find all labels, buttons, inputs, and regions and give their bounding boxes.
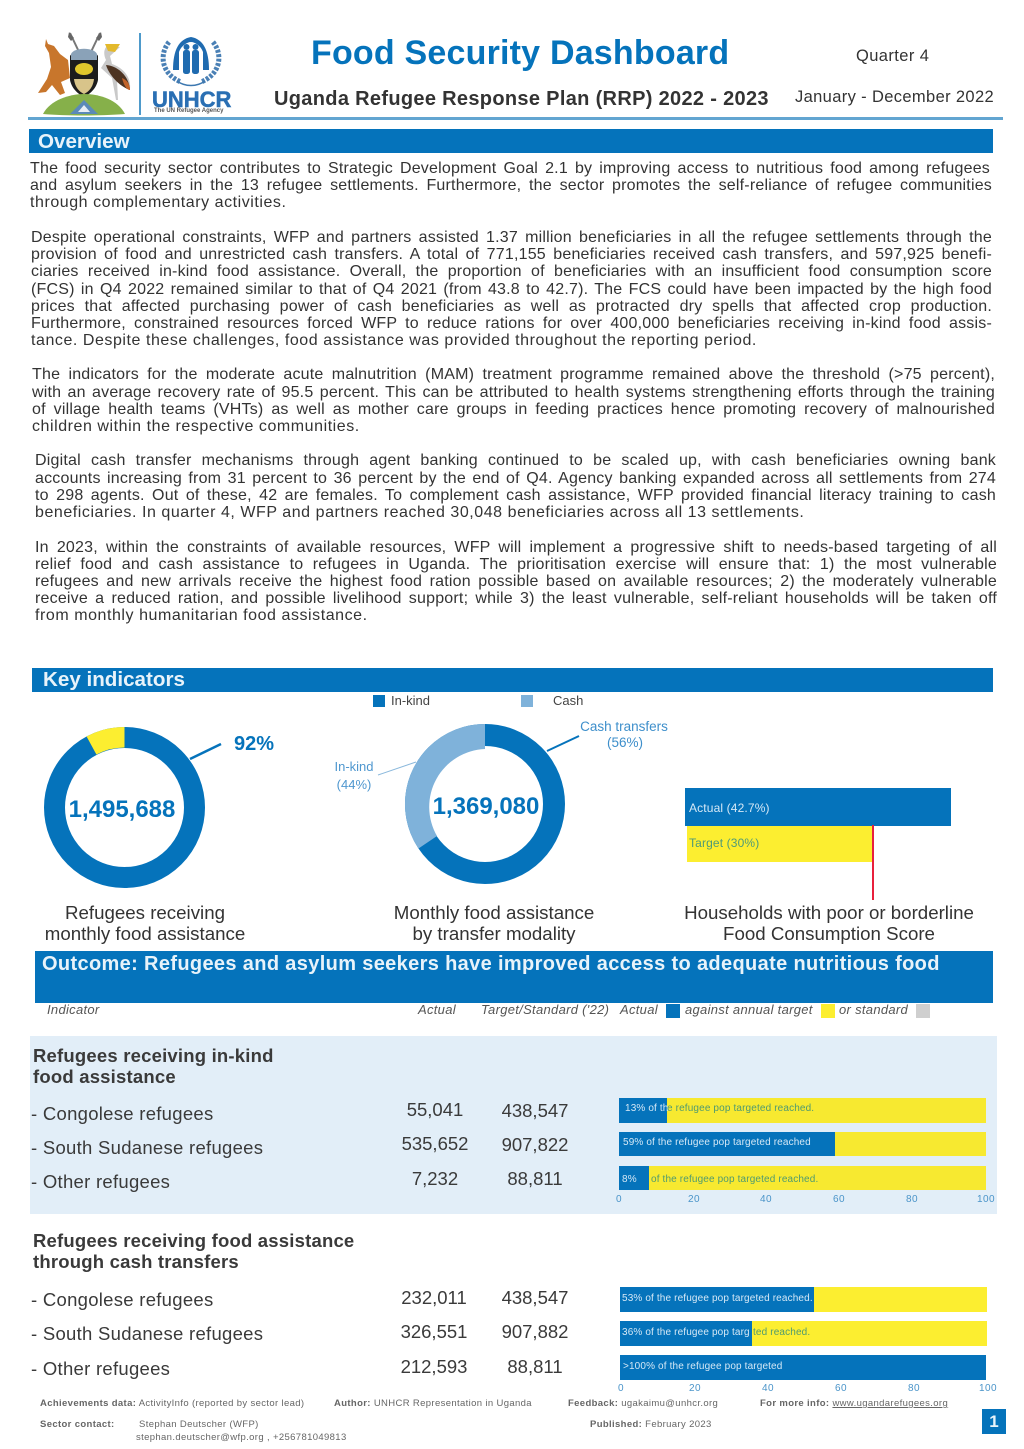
axis: 0 <box>616 1194 622 1205</box>
panel: in-kind <box>30 1036 997 1214</box>
axis: 20 <box>689 1383 701 1394</box>
logo: UNHCR <box>152 37 232 114</box>
logo tagline: The UN Refugee Agency <box>154 108 223 114</box>
paragraph 2 <box>31 229 992 349</box>
paragraph 3: children within the respective communities. <box>32 418 360 435</box>
subheading: in-kind: food assistance <box>33 1066 176 1087</box>
axis: 80 <box>906 1194 918 1205</box>
bar: other <box>619 1166 986 1190</box>
section: cash assistance <box>31 1230 568 1379</box>
value: 1,495,688: 1,495,688 <box>69 796 175 823</box>
row: South Sudanese: 326,551 <box>401 1321 467 1342</box>
bar chart: food consumption score <box>685 788 951 900</box>
quarter: Quarter 4 <box>856 47 929 65</box>
axis: 60 <box>835 1383 847 1394</box>
paragraph 1: and asylum seekers in the 13 refugee settlements. Furthermore, the sector promotes the self-reliance of refugee communities <box>30 177 992 194</box>
subheading: in-kind <box>33 1045 274 1087</box>
caption: food consumption: Households with poor or borderline <box>684 902 974 923</box>
paragraph 4 <box>35 452 996 521</box>
overview heading: Overview <box>38 130 130 153</box>
row: South Sudanese <box>31 1133 568 1158</box>
row: other: 7,232 <box>412 1168 458 1189</box>
footer: sector contact: Sector contact: <box>40 1419 115 1430</box>
logo divider <box>139 33 141 115</box>
bar: target <box>687 826 873 862</box>
paragraph 5: refugees and new arrivals receive the highest food ration possible based on available resources; 2) the moderately vulnerable <box>35 573 997 590</box>
bar: South Sudanese <box>619 1132 986 1156</box>
overview text <box>30 160 997 624</box>
subheading: cash <box>33 1230 354 1272</box>
row: Congolese: - Congolese refugees <box>31 1103 214 1124</box>
axis: 20 <box>688 1194 700 1205</box>
bar chart: in-kind <box>616 1098 995 1205</box>
paragraph 3 <box>32 366 995 435</box>
legend: actual <box>619 1002 680 1018</box>
bar: actual: Actual (42.7%) <box>689 801 770 815</box>
row: Congolese: 55,041 <box>407 1099 463 1120</box>
bar: other <box>620 1355 986 1380</box>
bar: South Sudanese: ted reached. <box>753 1327 810 1338</box>
paragraph 3: of village health teams (VHTs) as well as mother care groups in feeding practices hence promoting recovery of malnourished <box>32 401 995 418</box>
key indicators heading <box>32 668 993 692</box>
row: other: - Other refugees <box>31 1171 170 1192</box>
caption: refugees receiving <box>45 902 245 944</box>
legend: annual target: against annual target <box>685 1002 813 1017</box>
icon: UNHCR wreath and people <box>160 37 222 86</box>
axis: 100 <box>977 1194 995 1205</box>
legend: in-kind <box>373 693 430 708</box>
axis: 100 <box>979 1383 997 1394</box>
key indicators heading: Key indicators <box>43 668 185 691</box>
paragraph 2: tance. Despite these challenges, food assistance was provided throughout the reporting period. <box>31 332 757 349</box>
axis <box>618 1383 997 1394</box>
footer: contact details <box>136 1419 347 1444</box>
table header <box>47 1002 930 1018</box>
legend: transfer modality <box>373 693 583 708</box>
subheading: in-kind: Refugees receiving in-kind <box>33 1045 274 1066</box>
bar: other: >100% of the refugee pop targeted <box>623 1361 782 1372</box>
bar: South Sudanese: 36% of the refugee pop targ <box>622 1327 750 1338</box>
row: South Sudanese: - South Sudanese refugees <box>31 1137 263 1158</box>
bar: Congolese: 13% of th <box>625 1103 669 1114</box>
bar: South Sudanese: 59% of the refugee pop targeted reached <box>623 1137 811 1148</box>
legend: standard: or standard <box>839 1002 908 1017</box>
row: Congolese <box>31 1099 568 1124</box>
caption: food consumption <box>684 902 974 944</box>
legend: in-kind: In-kind <box>391 693 430 708</box>
footer: published: Published: February 2023 <box>590 1419 712 1430</box>
paragraph 2: prices that affected purchasing power of cash beneficiaries as well as protracted dry spells that affected crop production. <box>31 298 992 315</box>
footer: feedback: Feedback: ugakaimu@unhcr.org <box>568 1398 718 1409</box>
caption: transfer modality: Monthly food assistance <box>394 902 594 923</box>
paragraph 2: Despite operational constraints, WFP and partners assisted 1.37 million beneficiaries in all the refugee settlements through the <box>31 229 992 246</box>
value: 1,369,080: 1,369,080 <box>433 793 539 820</box>
paragraph 4: to 298 agents. Out of these, 42 are females. To complement cash assistance, WFP provided financial literacy training to cash <box>35 487 996 504</box>
bar: Congolese: 53% of the refugee pop targeted reached. <box>622 1293 813 1304</box>
column: actual: Actual <box>418 1002 456 1017</box>
axis: 80 <box>908 1383 920 1394</box>
row: South Sudanese: 535,652 <box>402 1133 468 1154</box>
paragraph 4: beneficiaries. In quarter 4, WFP and partners reached 30,048 beneficiaries across all 13 settlements. <box>35 504 804 521</box>
label: in-kind 44%: In-kind <box>334 759 374 774</box>
label: cash 56%: Cash transfers <box>580 719 668 734</box>
paragraph 5: from monthly humanitarian food assistance. <box>35 607 368 624</box>
label: 92%: 92% <box>234 733 274 755</box>
subheading: cash: Refugees receiving food assistance <box>33 1230 354 1251</box>
paragraph 4: accounts increasing from 31 percent to 36 percent by the end of Q4. Agency banking expanded across all settlements from 274 <box>35 470 996 487</box>
footer: more info: For more info: www.ugandarefugees.org <box>760 1398 948 1409</box>
axis: 40 <box>760 1194 772 1205</box>
paragraph 3: The indicators for the moderate acute malnutrition (MAM) treatment programme remained above the threshold (>75 percent), <box>32 366 995 383</box>
axis: 40 <box>762 1383 774 1394</box>
subtitle: Uganda Refugee Response Plan (RRP) 2022 - 2023 <box>274 88 769 110</box>
bar: other: 8% <box>622 1174 637 1185</box>
row: other: - Other refugees <box>31 1358 170 1379</box>
row: Congolese <box>31 1287 568 1310</box>
row: South Sudanese: - South Sudanese refugees <box>31 1323 263 1344</box>
row: Congolese: 232,011 <box>401 1287 467 1308</box>
footer: data source: Achievements data: ActivityInfo (reported by sector lead) <box>40 1398 304 1409</box>
legend: actual: Actual <box>620 1002 658 1017</box>
page number <box>982 1409 1006 1434</box>
column: target: Target/Standard ('22) <box>481 1002 609 1017</box>
paragraph 1: through complementary activities. <box>30 194 286 211</box>
bar: target: Target (30%) <box>689 836 759 850</box>
paragraph 3: with an average recovery rate of 95.5 percent. This can be attributed to health systems strengthening efforts through the training <box>32 384 995 401</box>
period: January - December 2022 <box>795 88 994 106</box>
subheading: cash: through cash transfers <box>33 1251 239 1272</box>
bar: actual <box>685 788 951 826</box>
paragraph 5: receive a reduced ration, and possible livelihood support; while 3) the least vulnerable, self-reliant households will be taken off <box>35 590 997 607</box>
paragraph 5 <box>35 539 997 624</box>
row: other: 212,593 <box>401 1356 467 1377</box>
logo: Uganda coat of arms <box>38 32 130 116</box>
bar: Congolese <box>619 1098 986 1123</box>
row: Congolese: - Congolese refugees <box>31 1289 214 1310</box>
outcome heading: Outcome: Refugees and asylum seekers have improved access to adequate nutritious food <box>42 953 940 975</box>
bar: other: of the refugee pop targeted reached. <box>651 1174 818 1185</box>
caption: transfer modality: by transfer modality <box>412 923 576 944</box>
paragraph 4: Digital cash transfer mechanisms through agent banking continued to be scaled up, with cash beneficiaries owning bank <box>35 452 996 469</box>
overview heading <box>29 129 993 153</box>
row: South Sudanese: 907,822 <box>502 1134 568 1155</box>
caption: transfer modality <box>394 902 594 944</box>
bar: Congolese <box>620 1287 987 1312</box>
caption: food consumption: Food Consumption Score <box>723 923 935 944</box>
footer: contact details: stephan.deutscher@wfp.org , +256781049813 <box>136 1432 347 1442</box>
legend: cash: Cash <box>553 693 583 708</box>
row: South Sudanese: 907,882 <box>502 1321 568 1342</box>
footer: author: Author: UNHCR Representation in Uganda <box>334 1398 532 1409</box>
row: other: 88,811 <box>507 1356 563 1377</box>
outcome heading <box>35 951 993 1003</box>
donut chart: transfer modality <box>334 719 668 884</box>
header <box>38 32 994 116</box>
axis: 60 <box>833 1194 845 1205</box>
row: Congolese: 438,547 <box>502 1287 568 1308</box>
paragraph 1: The food security sector contributes to Strategic Development Goal 2.1 by improving access to nutritious food among refugees <box>30 160 990 177</box>
page number: 1 <box>989 1412 999 1431</box>
footer <box>40 1398 948 1442</box>
paragraph 2: ciaries received in-kind food assistance. Overall, the proportion of beneficiaries with an insufficient food consumption score <box>31 263 992 280</box>
paragraph 5: In 2023, within the constraints of available resources, WFP will implement a progressive shift to needs-based targeting of all <box>35 539 997 556</box>
axis: 0 <box>618 1383 624 1394</box>
legend: cash <box>521 693 583 708</box>
axis <box>616 1194 995 1205</box>
column: indicator: Indicator <box>47 1002 100 1017</box>
paragraph 2: Furthermore, constrained resources forced WFP to reduce rations for over 400,000 beneficiaries receiving in-kind food assis- <box>31 315 992 332</box>
label: cash 56%: (56%) <box>607 735 643 750</box>
section: in-kind assistance <box>31 1045 568 1192</box>
caption: refugees receiving: Refugees receiving <box>65 902 225 923</box>
logo wordmark: UNHCR <box>152 87 231 112</box>
bar: Congolese: e refugee pop targeted reached. <box>667 1103 814 1114</box>
row: South Sudanese <box>31 1321 568 1344</box>
paragraph 5: relief food and cash assistance to refugees in Uganda. The prioritisation exercise will ensure that: 1) the most vulnerable <box>35 556 997 573</box>
row: other: 88,811 <box>507 1168 563 1189</box>
title: Food Security Dashboard <box>311 34 729 72</box>
caption: refugees receiving: monthly food assistance <box>45 923 245 944</box>
paragraph 2: (FCS) in Q4 2022 remained similar to that of Q4 2021 (from 43.8 to 42.7). The FCS could have been impacted by the high food <box>31 281 992 298</box>
row: other <box>31 1168 563 1192</box>
donut chart: refugees receiving assistance <box>44 727 274 888</box>
paragraph 1 <box>30 160 992 211</box>
footer: contact details: Stephan Deutscher (WFP) <box>139 1419 259 1430</box>
row: Congolese: 438,547 <box>502 1100 568 1121</box>
paragraph 2: provision of food and unrestricted cash transfers. A total of 771,155 beneficiaries received cash transfers, and 597,925 benefi- <box>31 246 992 263</box>
bar: South Sudanese <box>620 1321 987 1346</box>
row: other <box>31 1356 563 1379</box>
label: in-kind 44%: (44%) <box>337 777 371 792</box>
header rule <box>28 117 1003 120</box>
bar chart: cash <box>618 1287 997 1394</box>
target marker <box>872 825 874 900</box>
